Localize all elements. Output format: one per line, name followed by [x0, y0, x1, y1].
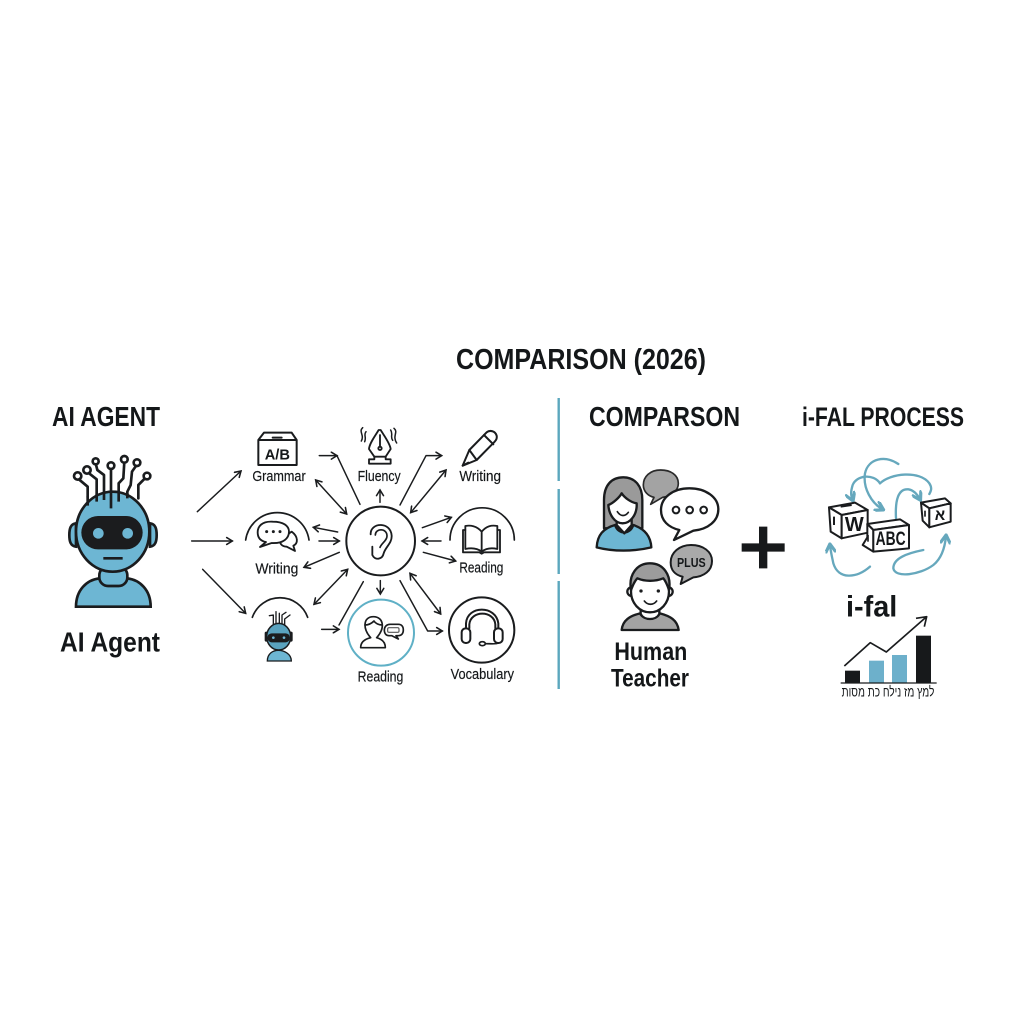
label: Human Teacher: Teacher — [611, 665, 689, 693]
icon: ABC block — [863, 519, 909, 552]
panel: i-FAL process — [829, 459, 951, 700]
panel: AI agent — [60, 456, 160, 658]
heading: AI Agent: AI AGENT — [52, 401, 160, 432]
icon: small robot — [252, 598, 308, 661]
icon: plus speech bubble — [671, 545, 712, 584]
label: Fluency: Fluency — [358, 469, 401, 485]
icon: boy — [622, 563, 679, 630]
panel: human teacher — [597, 470, 785, 693]
label: Reading bottom: Reading — [358, 670, 403, 686]
icon: woman — [597, 477, 651, 551]
bar chart — [841, 617, 937, 683]
icon: A/B box — [258, 433, 297, 465]
teal loop arrows — [830, 459, 946, 576]
icon: W block — [829, 503, 868, 538]
icon: open book — [450, 508, 514, 554]
icon: ABC block: ABC — [876, 529, 906, 550]
icon: speech bubbles — [246, 513, 309, 551]
icon: W block: W — [845, 514, 864, 536]
vertical divider — [558, 398, 560, 689]
icon: plus speech bubble: PLUS — [677, 556, 706, 570]
icon: aleph block — [921, 498, 951, 527]
heading: Comparison: COMPARSON — [589, 401, 740, 432]
icon: teal circle with person — [348, 600, 414, 666]
icon: plus sign — [742, 527, 785, 568]
heading: i-FAL process: i-FAL PROCESS — [802, 402, 964, 432]
icon: grey speech bubble — [643, 470, 678, 504]
icon: pen — [463, 431, 497, 466]
label: Writing top: Writing — [459, 469, 501, 485]
label: Reading right: Reading — [459, 561, 503, 577]
label: i-fal: i-fal — [846, 591, 897, 624]
icon: headset — [449, 597, 514, 663]
label: Human Teacher — [611, 638, 689, 693]
icon: A/B box: A/B — [265, 447, 290, 463]
label: Human Teacher: Human — [614, 638, 687, 666]
label: Vocabulary: Vocabulary — [451, 667, 515, 683]
icon: robot — [69, 456, 157, 607]
label: AI Agent: AI Agent — [60, 627, 160, 658]
main title: COMPARISON (2026) — [456, 344, 706, 376]
panel: skills network — [192, 428, 515, 686]
label: Writing left: Writing — [255, 561, 298, 577]
icon: aleph block: א — [935, 507, 946, 524]
label: Hebrew caption: למץ מז נילח כת מסות — [842, 684, 934, 700]
icon: fountain pen nib — [361, 428, 397, 464]
central circle: ear — [346, 507, 415, 575]
label: Grammar: Grammar — [252, 469, 306, 485]
icon: white speech bubble — [661, 488, 718, 540]
network arrows — [192, 456, 456, 631]
